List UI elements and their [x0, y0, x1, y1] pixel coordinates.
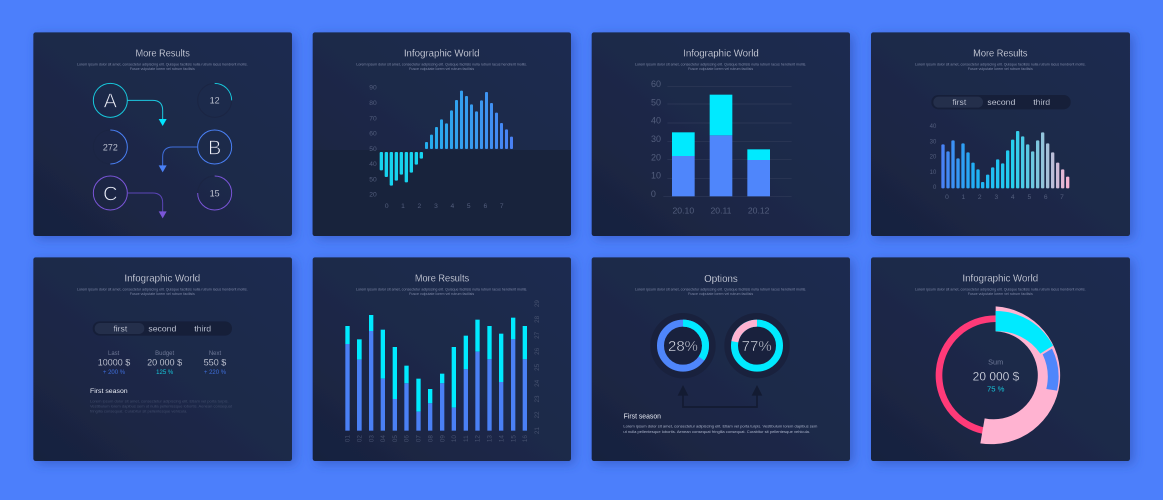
heading: First season: First season: [624, 412, 661, 421]
stat: Budget: Budget: [155, 351, 174, 357]
subtitle: Lorem ipsum dolor sit amet, consectetur adipiscing elit. Quisque facilisis nulla rutrum lacus hendrerit mollis.: [635, 287, 806, 291]
x axis labels: [345, 435, 529, 442]
arrow A: [127, 100, 167, 126]
stat: Next: + 220 %: [204, 370, 227, 376]
panel background: [871, 257, 1130, 461]
bars: [941, 131, 1069, 188]
tab selector: second: [987, 97, 1015, 107]
bar 20.11: [710, 95, 732, 196]
panel background: [313, 32, 571, 236]
x axis labels: 0: [385, 203, 389, 210]
subtitle: Lorem ipsum dolor sit amet, consectetur adipiscing elit. Quisque facilisis nulla rutrum lacus hendrerit mollis.: [915, 62, 1086, 66]
y axis labels: 40: [369, 161, 377, 168]
x axis labels: 01: [345, 435, 352, 442]
tab selector: [93, 321, 232, 336]
x axis labels: 7: [500, 203, 504, 210]
stat: Next: Next: [209, 351, 221, 357]
x axis labels: 14: [498, 435, 505, 442]
right axis labels: 26: [534, 347, 541, 355]
blue column segments: [345, 331, 527, 431]
circle 12: [198, 83, 232, 117]
subtitle: Fusce vulputate lorem vel rutrum facilisis: [130, 292, 195, 296]
connector arrows: [678, 385, 762, 407]
subtitle: [915, 62, 1086, 71]
panel: Infographic World radial: [871, 257, 1130, 461]
x axis labels: 06: [404, 435, 411, 442]
subtitle: Fusce vulputate lorem vel rutrum facilisis: [409, 292, 474, 296]
subtitle: Lorem ipsum dolor sit amet, consectetur adipiscing elit. Quisque facilisis nulla rutrum lacus hendrerit mollis.: [77, 287, 248, 291]
y axis labels: 30: [930, 139, 937, 145]
subtitle: [635, 62, 806, 71]
bar 20.12: [747, 149, 770, 196]
arrow B: [159, 147, 198, 172]
x axis labels: 20.10: [672, 205, 694, 215]
title: Infographic World: [962, 274, 1038, 285]
title: Options: [704, 274, 738, 285]
x axis labels: 5: [467, 203, 471, 210]
x axis labels: 16: [522, 435, 529, 442]
body text: Lorem ipsum dolor sit amet, consectetur adipiscing elit. Etiam vel porta turpis.: [90, 398, 229, 403]
stat: Last: + 200 %: [103, 370, 126, 376]
subtitle: Fusce vulputate lorem vel rutrum facilisis: [968, 67, 1033, 71]
title: Infographic World: [404, 49, 479, 60]
right axis labels: 29: [534, 300, 541, 307]
x axis labels: 20.11: [710, 205, 732, 215]
x axis labels: 2: [417, 203, 421, 210]
body text: Lorem ipsum dolor sit amet, consectetur adipiscing elit. Etiam vel porta turpis. Vestibulum lorem dapibus sem: [623, 424, 818, 429]
x axis labels: 2: [978, 194, 982, 201]
panel: Options donuts: [592, 257, 850, 461]
x axis labels: 1: [401, 203, 405, 210]
stat: Last: 10000 $: [98, 358, 130, 368]
y axis labels: 50: [369, 176, 377, 183]
panel: More Results gradient bars: [871, 32, 1130, 236]
stat: Next: 550 $: [204, 358, 226, 368]
circle 272: 272: [103, 142, 118, 152]
right axis labels: 23: [534, 395, 541, 403]
positive bars: [425, 91, 513, 149]
stat: Budget: [147, 351, 182, 376]
subtitle: Lorem ipsum dolor sit amet, consectetur adipiscing elit. Quisque facilisis nulla rutrum lacus hendrerit mollis.: [77, 62, 248, 66]
tab selector: third: [1033, 97, 1050, 107]
x axis labels: 5: [1027, 194, 1031, 201]
x axis labels: 08: [427, 435, 434, 442]
y axis labels: 70: [369, 115, 377, 122]
circle B: B: [208, 137, 221, 159]
stat: Last: Last: [108, 351, 120, 357]
subtitle: [356, 287, 527, 296]
bar 20.10: [672, 132, 695, 196]
title: More Results: [973, 49, 1027, 60]
x axis labels: 04: [380, 435, 387, 442]
x axis labels: 10: [451, 435, 458, 442]
x axis labels: 3: [994, 194, 998, 201]
tab selector: [931, 95, 1071, 109]
subtitle: [915, 287, 1086, 296]
stat: Budget: 125 %: [156, 370, 174, 376]
title: Infographic World: [124, 274, 200, 285]
right axis labels: [534, 300, 541, 434]
donut 77%: [724, 313, 790, 378]
x axis labels: 4: [450, 203, 454, 210]
subtitle: [77, 62, 248, 71]
y axis labels: 20: [930, 155, 937, 161]
cyan column segments: [345, 315, 527, 412]
donut 28%: [650, 313, 716, 378]
tab selector: first: [113, 323, 128, 333]
subtitle: [635, 287, 806, 296]
y axis labels: 50: [369, 146, 377, 153]
x axis labels: 15: [510, 435, 517, 442]
y axis labels: 50: [651, 97, 661, 107]
cyan ring segment: [996, 311, 1053, 354]
subtitle: Lorem ipsum dolor sit amet, consectetur adipiscing elit. Quisque facilisis nulla rutrum lacus hendrerit mollis.: [356, 62, 527, 66]
panel: Infographic World diverging bars: [313, 32, 571, 236]
x axis labels: 6: [1044, 194, 1048, 201]
donut 28%: 28%: [668, 338, 698, 355]
subtitle: Fusce vulputate lorem vel rutrum facilisis: [409, 67, 474, 71]
center summary: 20 000 $: [973, 369, 1020, 383]
y axis labels: 60: [651, 79, 661, 89]
pink ring segment: [980, 306, 1060, 444]
stat: Next: [204, 351, 227, 376]
body text: [90, 398, 233, 413]
title: More Results: [135, 49, 190, 60]
circle 15: [198, 176, 232, 210]
stat: Last: [98, 351, 130, 376]
circle C: C: [103, 183, 118, 205]
y axis labels: 30: [651, 134, 661, 144]
subtitle: Lorem ipsum dolor sit amet, consectetur adipiscing elit. Quisque facilisis nulla rutrum lacus hendrerit mollis.: [356, 287, 527, 291]
y axis labels: 80: [369, 100, 377, 107]
subtitle: Lorem ipsum dolor sit amet, consectetur adipiscing elit. Quisque facilisis nulla rutrum lacus hendrerit mollis.: [915, 287, 1086, 291]
y axis labels: 20: [369, 191, 377, 198]
x axis labels: 02: [357, 435, 364, 442]
y axis labels: 20: [651, 152, 661, 162]
blue ring segment: [1043, 349, 1059, 391]
x axis labels: 6: [483, 203, 487, 210]
title: More Results: [415, 274, 469, 285]
subtitle: Fusce vulputate lorem vel rutrum facilisis: [130, 67, 195, 71]
y axis labels: 10: [930, 170, 937, 176]
red ring segment: [939, 319, 996, 431]
circle 12: 12: [210, 96, 220, 106]
circle A: [93, 83, 127, 117]
circle 272: [93, 130, 127, 164]
y axis labels: 40: [651, 116, 661, 126]
subtitle: Fusce vulputate lorem vel rutrum facilisis: [688, 292, 753, 296]
title: Infographic World: [683, 49, 759, 60]
y axis labels: [369, 85, 377, 198]
body text: fringilla consequat. Curabitur sit pellentesque vehicula.: [90, 408, 187, 413]
circle C: [93, 176, 127, 210]
arrow C: [127, 193, 167, 218]
right axis labels: 24: [534, 379, 541, 387]
x axis labels: [945, 194, 1064, 201]
subtitle: Fusce vulputate lorem vel rutrum facilisis: [968, 292, 1033, 296]
y axis labels: 60: [369, 131, 377, 138]
stat: Budget: 20 000 $: [147, 358, 182, 368]
x axis labels: 0: [945, 194, 949, 201]
center summary: [973, 358, 1020, 394]
y axis labels: 0: [933, 185, 937, 191]
x axis labels: [672, 205, 770, 215]
tab selector: second: [148, 323, 176, 333]
y axis labels: [930, 124, 937, 191]
x axis labels: 09: [439, 435, 446, 442]
x axis labels: 3: [434, 203, 438, 210]
donut 77%: 77%: [742, 338, 772, 355]
x axis labels: 20.12: [748, 205, 770, 215]
x axis labels: 05: [392, 435, 399, 442]
panel background: [871, 32, 1130, 236]
dark lower band: [313, 150, 571, 236]
y axis labels: 40: [930, 124, 937, 130]
body text: [623, 424, 818, 434]
x axis labels: 13: [487, 435, 494, 442]
circle A: A: [104, 91, 118, 113]
tab selector: third: [194, 323, 211, 333]
panel background: [592, 32, 850, 236]
right axis labels: 27: [534, 331, 541, 339]
center summary: 75 %: [987, 385, 1005, 394]
x axis labels: 03: [368, 435, 375, 442]
x axis labels: 07: [416, 435, 423, 442]
subtitle: Fusce vulputate lorem vel rutrum facilisis: [688, 67, 753, 71]
subtitle: [356, 62, 527, 71]
y axis labels: 0: [651, 189, 656, 199]
panel background: [313, 257, 571, 461]
x axis labels: 12: [475, 435, 482, 442]
negative bars: [380, 152, 423, 186]
panel: Infographic World stacked bars: [592, 32, 850, 236]
grid lines: [663, 86, 792, 196]
panel: More Results stacked columns: [313, 257, 571, 461]
y axis labels: 90: [369, 85, 377, 92]
panel background: [33, 257, 292, 461]
heading: First season: First season: [90, 388, 128, 395]
y axis labels: 10: [651, 171, 661, 181]
x axis labels: 1: [961, 194, 965, 201]
right axis labels: 25: [534, 363, 541, 371]
right axis labels: 22: [534, 411, 541, 419]
panel background: [33, 32, 292, 236]
body text: ut nulla pellentesque lobortis. Aenean consequat fringilla consequat. Curabitur sit pellentesque vehicula.: [623, 429, 810, 434]
panel: More Results circles: [33, 32, 292, 236]
body text: Vestibulum lorem dapibus sem ut nulla pellentesque lobortis. Aenean consequat: [90, 403, 233, 408]
subtitle: [77, 287, 248, 296]
x axis labels: 11: [463, 435, 470, 442]
tab selector: first: [952, 97, 967, 107]
circle 15: 15: [210, 188, 220, 198]
right axis labels: 21: [534, 427, 541, 434]
panel background: [592, 257, 850, 461]
x axis labels: [385, 203, 504, 210]
center summary: Sum: [988, 358, 1003, 367]
circle B: [198, 130, 232, 164]
right axis labels: 28: [534, 315, 541, 323]
y axis labels: [651, 79, 661, 199]
x axis labels: 4: [1011, 194, 1015, 201]
panel: Infographic World figures: [33, 257, 292, 461]
subtitle: Lorem ipsum dolor sit amet, consectetur adipiscing elit. Quisque facilisis nulla rutrum lacus hendrerit mollis.: [635, 62, 806, 66]
x axis labels: 7: [1060, 194, 1064, 201]
